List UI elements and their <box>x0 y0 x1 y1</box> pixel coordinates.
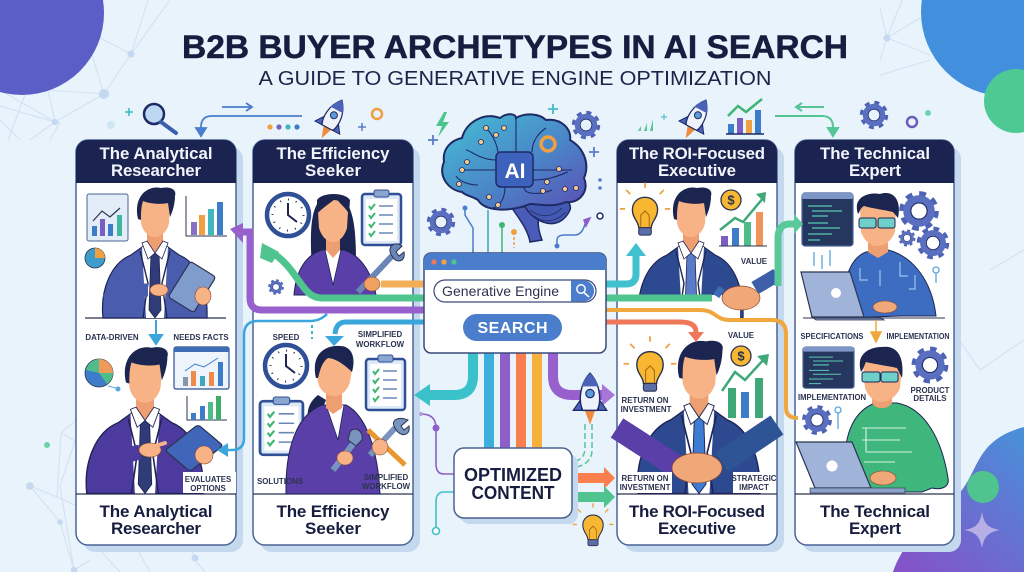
coin <box>721 190 741 210</box>
icon: AI brain <box>442 114 586 242</box>
icon: AI brain: AI <box>504 160 526 183</box>
growth chart <box>719 192 767 246</box>
panel: The ROI-Focused Executive: INVESTMENT <box>620 483 671 492</box>
panel: The Technical Expert <box>795 140 961 552</box>
flow arrow <box>150 320 162 344</box>
panel: The ROI-Focused Executive: The ROI-Focused <box>629 502 765 521</box>
clipboard <box>362 190 401 245</box>
arrow: purple ribbon to Analytical Researcher <box>230 223 430 310</box>
panel: The Technical Expert: Expert <box>849 161 901 180</box>
optimized content box <box>454 448 578 524</box>
search box: SEARCH <box>478 320 548 337</box>
panel: The ROI-Focused Executive: Executive <box>658 161 736 180</box>
icon: gear top center <box>575 114 597 136</box>
tablet and hands <box>108 261 216 313</box>
woman top <box>294 194 376 295</box>
corner shape: bottom right blob <box>893 427 1024 572</box>
connector: teal thin <box>432 492 454 534</box>
icon: magnifier <box>144 104 176 133</box>
corner shape: green circle top right <box>984 69 1024 133</box>
handshake <box>716 275 777 310</box>
accent dots <box>44 108 931 448</box>
panel: The ROI-Focused Executive: RETURN ON <box>622 396 669 405</box>
panel: The Technical Expert: SPECIFICATIONS <box>800 332 864 341</box>
dots row <box>267 124 300 130</box>
dashed connector to rocket <box>572 424 592 468</box>
connector: purple thin <box>419 412 454 474</box>
panel: The Analytical Researcher <box>76 140 243 552</box>
bar chart lower <box>187 396 227 420</box>
arrow: teal ribbon to ROI <box>600 243 646 284</box>
gear small <box>270 281 282 293</box>
gears <box>900 196 946 256</box>
corner shape: purple circle top left <box>0 0 104 95</box>
pie chart lower <box>85 359 120 392</box>
browser chart <box>174 347 229 389</box>
arrow: thin cyan line <box>217 314 327 457</box>
panel: The ROI-Focused Executive: VALUE <box>741 257 767 266</box>
icon: rocket top left <box>309 94 354 145</box>
arrows: centre columns to optimized content <box>489 345 537 450</box>
clipboard lower right <box>366 355 405 410</box>
arrow: red-orange ribbon <box>600 322 704 342</box>
person <box>103 187 207 318</box>
arrow: teal left <box>414 345 473 406</box>
laptop lower <box>796 442 905 493</box>
search box: Generative Engine <box>442 283 559 299</box>
icon: lightning <box>436 112 449 137</box>
panel: The Analytical Researcher: The Analytical <box>100 502 212 521</box>
bar chart <box>186 196 227 236</box>
gear and pin <box>805 407 841 432</box>
panel: The Efficiency Seeker <box>253 140 420 552</box>
icon: ring and plus <box>358 109 382 131</box>
arrow: top left connector <box>196 103 302 136</box>
optimized content box: OPTIMIZED <box>464 465 562 485</box>
icon: bulb centre <box>573 503 613 546</box>
panel: The Efficiency Seeker: Seeker <box>305 519 361 538</box>
coin lower <box>731 346 751 366</box>
panel: The Efficiency Seeker: The Efficiency <box>276 144 390 163</box>
flow arrow <box>871 320 881 342</box>
icon: chart top right <box>726 99 764 134</box>
arrow: top right connector <box>775 103 838 136</box>
icon: gear left of search <box>430 211 452 233</box>
arrow: green ribbon to Technical <box>600 214 803 298</box>
subtitle: A GUIDE TO GENERATIVE ENGINE OPTIMIZATION <box>258 68 772 90</box>
bulb lower <box>624 336 676 391</box>
technical expert top <box>842 193 936 318</box>
bulb <box>620 183 670 235</box>
pie chart <box>85 248 105 268</box>
icon: small bars <box>638 114 667 131</box>
panel: The Technical Expert: IMPLEMENTATION <box>886 332 950 341</box>
panel: The ROI-Focused Executive: Executive <box>658 519 736 538</box>
technical expert lower <box>842 347 948 492</box>
wrench and hand <box>358 244 404 292</box>
clock <box>267 194 309 236</box>
panel: The ROI-Focused Executive: RETURN ON <box>622 474 669 483</box>
panel: The Analytical Researcher: DATA-DRIVEN <box>85 333 139 342</box>
panel: The Technical Expert: The Technical <box>820 144 930 163</box>
panel: The Efficiency Seeker: The Efficiency <box>276 502 390 521</box>
panel: The Efficiency Seeker: SIMPLIFIED <box>364 473 408 482</box>
panel: The Technical Expert: PRODUCT <box>910 386 950 395</box>
panel: The Efficiency Seeker: SOLUTIONS <box>257 477 303 486</box>
clipboard lower left <box>260 397 303 455</box>
icon: plus sparkles <box>428 104 599 157</box>
arrow: purple right <box>553 345 615 406</box>
arrow: orange to ROI <box>572 467 615 489</box>
search box <box>424 253 606 353</box>
panel: The Efficiency Seeker: Seeker <box>305 161 361 180</box>
handshake lower <box>617 425 777 483</box>
title: B2B BUYER ARCHETYPES IN AI SEARCH <box>182 29 848 65</box>
panel: The ROI-Focused Executive: INVESTMENT <box>621 405 672 414</box>
panel: The Technical Expert: DETAILS <box>913 394 947 403</box>
crossed tools <box>333 418 409 470</box>
panel: The Analytical Researcher: Researcher <box>111 519 201 538</box>
arrow: green to ROI <box>572 486 615 508</box>
person <box>639 187 743 318</box>
arrow: green ribbon to Efficiency Seeker <box>260 243 430 298</box>
code window <box>802 193 853 246</box>
corner shape: blue circle top right <box>921 0 1024 96</box>
panel: The Analytical Researcher: NEEDS FACTS <box>173 333 229 342</box>
laptop <box>801 272 945 320</box>
panel: The Technical Expert: The Technical <box>820 502 930 521</box>
arrow: blue ribbon down <box>325 322 430 346</box>
arrow: orange thin to Technical lower <box>600 310 798 418</box>
person lower <box>638 341 760 494</box>
gear lower <box>916 351 944 379</box>
code window lower <box>803 347 854 388</box>
panel: The Efficiency Seeker: SIMPLIFIED <box>358 330 402 339</box>
growth chart lower <box>722 354 769 418</box>
clock lower <box>265 345 307 387</box>
panel: The Analytical Researcher: EVALUATES <box>185 475 231 484</box>
person lower <box>86 347 203 493</box>
optimized content box: CONTENT <box>472 483 554 503</box>
tablet lower and hands <box>98 425 223 471</box>
panel: The Efficiency Seeker: WORKFLOW <box>356 340 405 349</box>
arrow: orange ribbon <box>381 280 430 288</box>
icon: rocket top right <box>673 94 718 145</box>
icon: gear top right <box>863 104 885 126</box>
chart card <box>87 194 128 241</box>
panel: The Efficiency Seeker: SPEED <box>273 333 300 342</box>
panel: The ROI-Focused Executive <box>617 140 784 552</box>
panel: The Analytical Researcher: Researcher <box>111 161 201 180</box>
panel: The ROI-Focused Executive: The ROI-Focused <box>629 144 765 163</box>
panel: The Technical Expert: Expert <box>849 519 901 538</box>
pins <box>814 250 939 283</box>
connectors: brain to search box <box>462 178 603 253</box>
woman lower <box>286 346 380 494</box>
panel: The Technical Expert: IMPLEMENTATION <box>798 393 866 402</box>
panel: The Efficiency Seeker: WORKFLOW <box>362 482 411 491</box>
panel: The ROI-Focused Executive: STRATEGIC <box>731 474 777 483</box>
panel: The ROI-Focused Executive: IMPACT <box>739 483 769 492</box>
icon: rocket centre <box>573 373 607 425</box>
panel: The ROI-Focused Executive: VALUE <box>728 331 754 340</box>
panel: The Analytical Researcher: OPTIONS <box>190 484 226 493</box>
panel: The Analytical Researcher: The Analytical <box>100 144 212 163</box>
